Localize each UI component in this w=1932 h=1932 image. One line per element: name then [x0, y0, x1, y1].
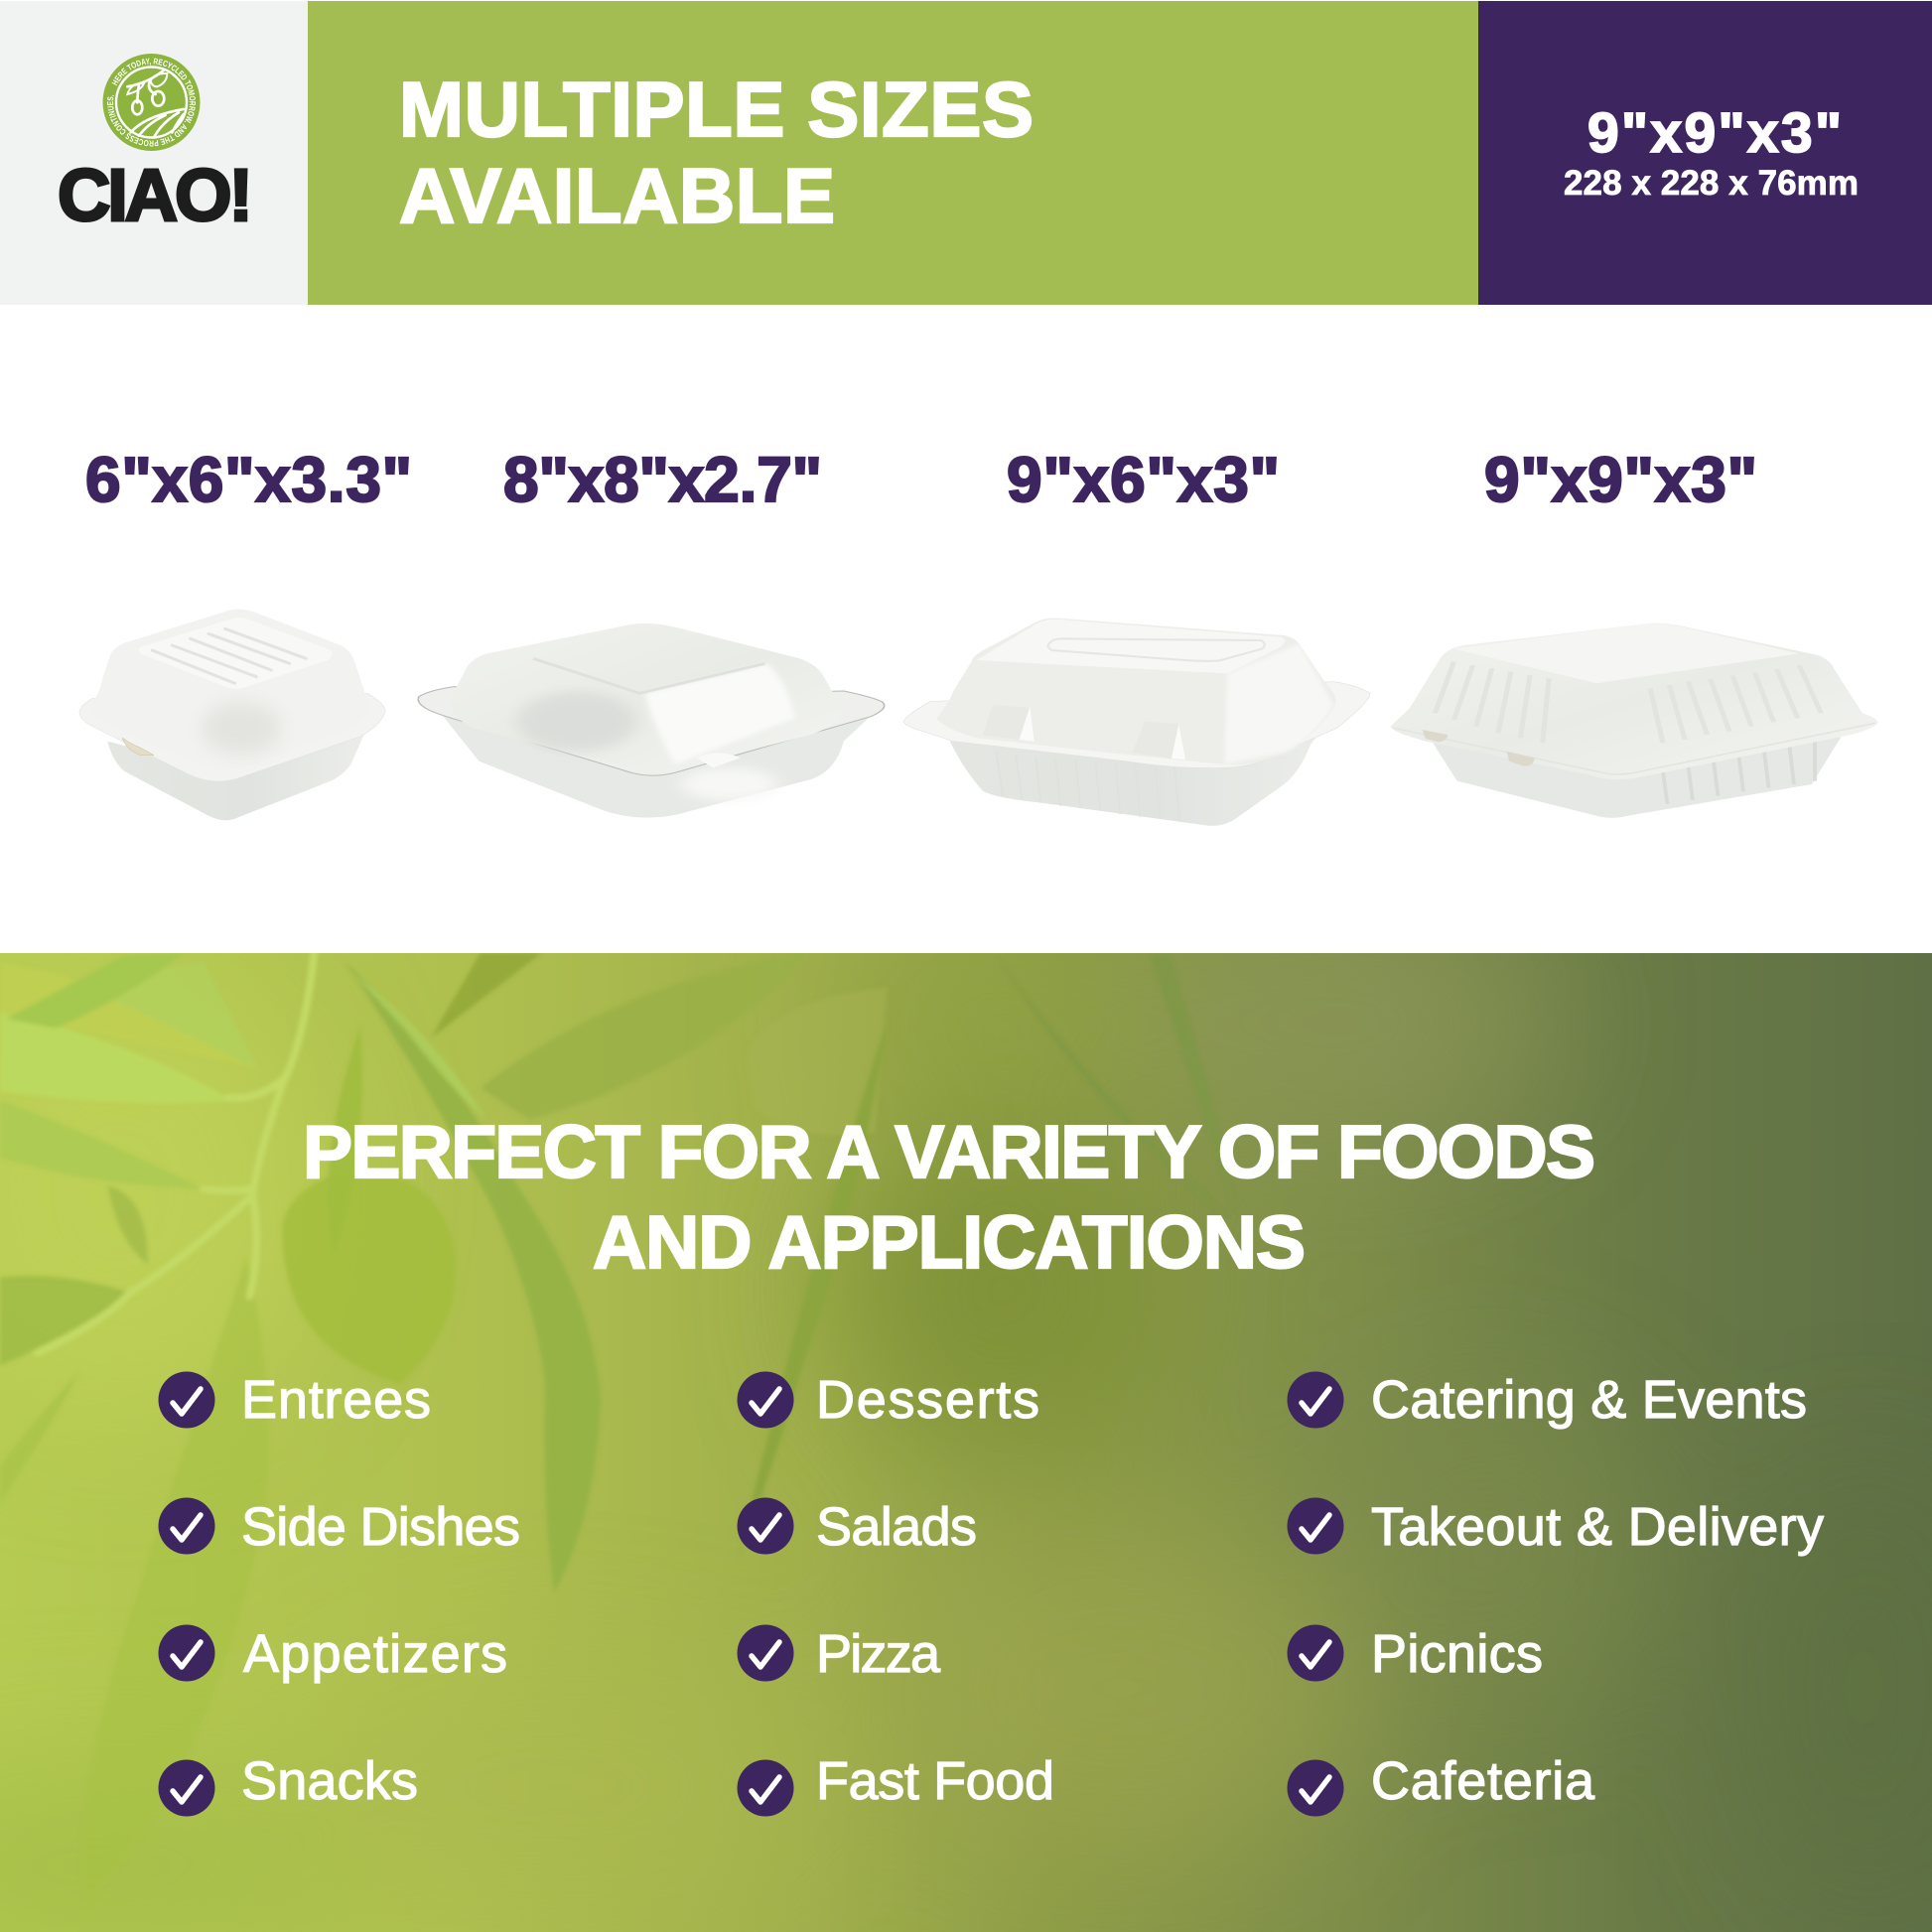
item: Picnics [1287, 1624, 1543, 1684]
item: Snacks [159, 1751, 418, 1817]
checklist column 2 [737, 1370, 1054, 1817]
item: Catering & Events: Catering & Events [1371, 1370, 1807, 1430]
item: Picnics: Picnics [1371, 1624, 1543, 1684]
container: 6x6 [79, 610, 385, 820]
heading: foods and applications: AND APPLICATIONS [593, 1200, 1306, 1284]
item: Fast Food [737, 1751, 1054, 1817]
item: Salads [737, 1497, 977, 1557]
item: Pizza [737, 1624, 941, 1684]
size labels: 8"x8"x2.7" [503, 444, 822, 515]
icon: olive seal: HERE TODAY, RECYCLED TOMORROW. AND THE PROCESS CONTINUES. [107, 58, 196, 147]
item: Salads: Salads [816, 1497, 977, 1557]
item: Fast Food: Fast Food [816, 1751, 1054, 1811]
heading: multiple sizes: MULTIPLE SIZES [399, 66, 1034, 153]
panel: purple size callout [1478, 1, 1932, 305]
panel: green header [308, 1, 1478, 305]
size labels: 9"x6"x3" [1007, 444, 1280, 515]
heading: foods and applications [303, 1110, 1595, 1284]
item: Cafeteria: Cafeteria [1371, 1751, 1595, 1811]
container: 9x9 [1391, 623, 1878, 818]
heading: multiple sizes: AVAILABLE [399, 152, 835, 239]
item: Cafeteria [1287, 1751, 1595, 1817]
panel: purple size callout: 9"x9"x3" [1587, 101, 1842, 165]
item: Pizza: Pizza [816, 1624, 941, 1684]
item: Appetizers: Appetizers [243, 1624, 507, 1684]
checklist column 3 [1287, 1370, 1824, 1817]
item: Entrees [159, 1370, 431, 1430]
heading: foods and applications: PERFECT FOR A VARIETY OF FOODS [303, 1110, 1595, 1193]
panel: food applications [0, 913, 1932, 1932]
size labels: 6"x6"x3.3" [85, 444, 412, 515]
checklist column 1 [159, 1370, 520, 1817]
item: Side Dishes: Side Dishes [241, 1497, 520, 1557]
logo wordmark: CIAO! [58, 154, 253, 236]
item: Snacks: Snacks [241, 1751, 418, 1811]
panel: logo [0, 1, 308, 305]
item: Entrees: Entrees [241, 1370, 431, 1430]
container: 9x6 [903, 618, 1370, 826]
size labels: 9"x9"x3" [1484, 444, 1757, 515]
size labels [85, 444, 1757, 515]
item: Takeout & Delivery: Takeout & Delivery [1371, 1497, 1824, 1557]
photo background: olive branch [0, 913, 1932, 1932]
container: 8x8 [418, 623, 885, 818]
heading: multiple sizes [399, 66, 1034, 239]
panel: purple size callout: 228 x 228 x 76mm [1564, 164, 1859, 203]
item: Desserts: Desserts [816, 1370, 1039, 1430]
